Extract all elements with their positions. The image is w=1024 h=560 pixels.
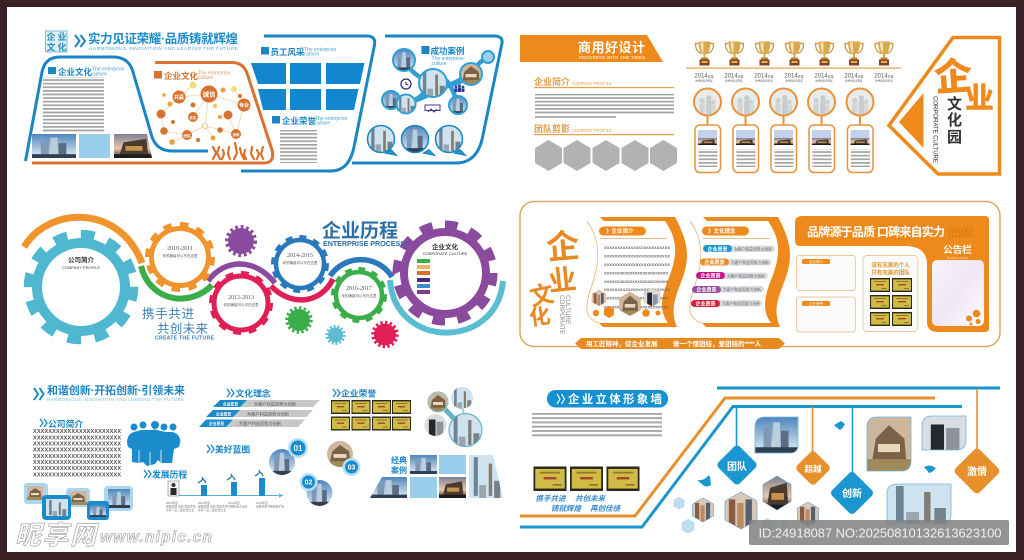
- section: values network: 诚信: [202, 90, 216, 98]
- development timeline: 2014年度: [228, 501, 240, 505]
- calligraphy title: 化: [528, 305, 552, 330]
- gear: corporate culture: [397, 225, 493, 321]
- company profile: XXXXXXXXXXXXXXXXXXXXXXX: [33, 460, 121, 466]
- culture concept: [199, 388, 320, 427]
- timeline line: [686, 68, 901, 69]
- section: success cases: 成功案例: [430, 46, 465, 56]
- section: honors text: [272, 116, 347, 163]
- blueprint: 美好蓝图: [215, 444, 250, 454]
- section: culture text block: [43, 66, 124, 133]
- wavy profile panel: XXXXXXXXXXXXXXXXXXXXXXXXX: [604, 304, 668, 310]
- box labels: 企业荣誉: [809, 301, 824, 306]
- crowd silhouette: [213, 143, 263, 159]
- gear: 2010-2011: 你的铸接可以写在这里: [162, 253, 198, 258]
- company profile: XXXXXXXXXXXXXXXXXXXXXXX: [33, 429, 121, 435]
- gear: 2014-2015: 你的铸接可以写在这里: [282, 260, 318, 265]
- logo badge: 文化: [46, 42, 66, 52]
- development timeline: 2010年度: [166, 501, 178, 505]
- wavy values panel: [690, 217, 790, 327]
- development timeline: 重要荣誉不断积累扩张: [256, 504, 284, 508]
- gear: company profile: [28, 234, 134, 340]
- watermark: 昵享网: [15, 520, 100, 550]
- company profile: XXXXXXXXXXXXXXXXXXXXXXX: [33, 442, 121, 448]
- team photos: 团队剪影: [534, 123, 570, 134]
- company profile: 企业简介: [534, 76, 570, 87]
- bulletin board: 企业文化: [947, 225, 975, 239]
- subheading: HARMONIOUS INNOVATION AND LEADING THE FUTURE: [47, 397, 184, 402]
- year labels: 优秀团队荣誉奖: [725, 78, 743, 82]
- bottom banner: 用工匠精神，促企业发展: [586, 339, 658, 348]
- hanging lines: [736, 389, 977, 473]
- company profile: XXXXXXXXXXXXXXXXXXXXXXX: [33, 472, 121, 478]
- gear: 2010-2011: 2010-2011: [167, 246, 193, 252]
- slogan: 铸就辉煌: [551, 504, 582, 513]
- development timeline: 重要荣誉 创建 科技奖项: [198, 504, 228, 508]
- diamond: innovate: 创新: [842, 487, 862, 500]
- diamond: innovate: [829, 470, 875, 516]
- classic cases: 经典: [391, 455, 407, 465]
- rotated label: CORPORATE CULTURE: [932, 96, 938, 163]
- culture concept: 企业愿景: [223, 402, 238, 406]
- calligraphy title: [933, 56, 994, 115]
- section: values network: [154, 70, 250, 145]
- heading chevrons: [34, 388, 44, 400]
- gear: 2012-2013: [212, 274, 270, 332]
- development timeline: [144, 468, 284, 512]
- wavy values panel: 企业愿景: [696, 286, 717, 294]
- company profile: XXXXXXXXXXXXXXXXXXXXXXX: [33, 436, 121, 442]
- gear: 2014-2015: 2014-2015: [287, 253, 313, 259]
- company profile: [534, 76, 674, 118]
- bulletin board: Bulletin board: [947, 256, 968, 260]
- wavy values panel: 为客户和益而努力创新: [722, 301, 760, 306]
- diamond: team: 团队: [727, 460, 747, 473]
- icon: team: [454, 84, 464, 92]
- section: values network: The enterprise: [198, 70, 230, 76]
- classic cases: 案例: [391, 465, 407, 475]
- gear: company profile: COMPANY PROFILE: [62, 265, 100, 270]
- small boxes: [796, 256, 918, 332]
- calligraphy title: 企: [545, 227, 581, 266]
- ribbon arcs: [24, 217, 503, 333]
- development timeline: 重要荣誉 创建 科技奖项: [166, 504, 196, 508]
- rotated label: CORPORATE: [558, 295, 565, 334]
- slogan: 携手共进: [536, 494, 567, 503]
- pale hexagons: [674, 497, 788, 534]
- wavy values panel: 为客户和益而努力创新: [734, 246, 772, 252]
- panel: orange timeline wall: [520, 35, 1000, 174]
- company profile: XXXXXXXXXXXXXXXXXXXXXXX: [33, 454, 121, 460]
- gear: 2016-2017: 你的铸接可以写在这里: [342, 293, 377, 298]
- section: success cases: [368, 46, 494, 155]
- gear title: ENTERPRISE PROCESS: [323, 239, 405, 248]
- gear: 2014-2015: [274, 238, 326, 290]
- wavy values panel: 企业愿景: [704, 259, 725, 266]
- wavy profile panel: XXXXXXXXXXXXXXXXXXXXXXXXX: [604, 245, 670, 250]
- box labels: [802, 259, 910, 306]
- header ribbon: PROGRESS WITH THE TIMES: [579, 55, 645, 60]
- wavy profile panel: XXXXXXXXXXXXXXXXXXXXXXXXX: [604, 287, 670, 292]
- heading chevrons: [75, 35, 85, 47]
- year labels: 2014年度: [754, 74, 774, 80]
- wavy values panel: 为客户和益而努力创新: [731, 260, 769, 265]
- year labels: [694, 74, 894, 82]
- diamond: passion: [953, 447, 1001, 495]
- section: success cases: The enterprise: [432, 56, 464, 62]
- heading pill: [547, 390, 668, 408]
- year labels: 2014年度: [694, 74, 714, 80]
- gear: 2012-2013: 你的铸接可以写在这里: [224, 302, 259, 307]
- diamond: passion: 激情: [967, 465, 987, 478]
- heading: 实力见证荣耀·品质铸就辉煌: [88, 31, 238, 46]
- frame lines: [26, 36, 502, 171]
- wavy values panel: 企业愿景: [707, 246, 728, 253]
- development timeline: 发展历程: [152, 468, 187, 480]
- culture concept: 文化理念: [236, 388, 271, 398]
- photo tiles: [24, 483, 133, 520]
- development timeline: 2012年度: [198, 501, 210, 505]
- year labels: 2014年度: [844, 74, 864, 80]
- arrow sign: [889, 38, 1000, 174]
- culture photos: [32, 134, 152, 158]
- id watermark: [749, 520, 1009, 545]
- gear: 2016-2017: [334, 270, 384, 320]
- gear: company profile: 公司简介: [68, 255, 94, 264]
- section: culture text block: The enterprise: [92, 66, 124, 72]
- gear title: [322, 219, 405, 248]
- calligraphy title: 业: [965, 82, 994, 115]
- slogan: 再创佳绩: [590, 504, 621, 513]
- photo circles: [424, 387, 482, 446]
- calligraphy title: 企: [933, 56, 974, 100]
- wavy values panel: 为客户和益而努力创新: [723, 287, 761, 292]
- section: values network: 务实: [190, 115, 197, 120]
- certificates: [871, 279, 911, 325]
- year labels: 优秀团队荣誉奖: [815, 78, 833, 82]
- bulletin board: 品牌源于品质 口碑来自实力: [807, 224, 945, 239]
- classic cases: [370, 455, 503, 498]
- section: values network: 企业文化: [164, 71, 199, 81]
- blueprint: 01: [294, 444, 303, 453]
- icon: birds: [697, 421, 936, 486]
- sign text: 园: [947, 129, 962, 146]
- rotated label: CULTURE: [564, 295, 571, 324]
- header ribbon: [520, 35, 663, 62]
- wavy values panel: 为客户和益而努力创新: [727, 274, 765, 278]
- blueprint: [207, 438, 360, 506]
- team photos: COMPANY PROFILE: [572, 128, 612, 133]
- section: values network: 团结: [184, 133, 191, 138]
- section: staff photos: [251, 47, 364, 110]
- section: values network: 专业: [239, 102, 249, 109]
- section: success cases: culture: [432, 61, 447, 67]
- culture concept: 为客户利益而努力创新: [239, 420, 281, 427]
- logo badge: [46, 31, 67, 52]
- slogan: 共创未来: [575, 494, 606, 503]
- development timeline: 获得了第二届最佳企业: [166, 508, 194, 512]
- subheading: HARMONIOUS INNOVATION AND LEADING THE FUTURE: [89, 46, 238, 52]
- box labels: 只有完美的团队: [871, 268, 910, 276]
- year labels: 优秀团队荣誉奖: [785, 78, 803, 82]
- sign text: [947, 95, 962, 146]
- blueprint: 02: [305, 480, 312, 486]
- gear: 2016-2017: 2016-2017: [346, 286, 372, 292]
- wavy profile panel: XXXXXXXXXXXXXXXXXXXXXXXXX: [604, 296, 668, 300]
- section: culture text block: culture: [92, 72, 107, 78]
- placeholder text lines: [532, 413, 662, 438]
- wavy values panel: 企业愿景: [700, 272, 721, 280]
- gear: corporate culture: CORPORATE CULTURE: [423, 251, 468, 256]
- slogan: [142, 306, 214, 342]
- icon: clock: [401, 79, 411, 89]
- year labels: 2014年度: [814, 74, 834, 80]
- bottom banner: [575, 338, 785, 349]
- company profile: [33, 418, 121, 478]
- section: honors text: 企业荣誉: [282, 116, 317, 126]
- speech bubble photos: [368, 126, 465, 155]
- slogan: CREATE THE FUTURE: [155, 336, 214, 342]
- development timeline: 2016年度: [256, 501, 268, 505]
- icon: handshake: [425, 105, 440, 112]
- bottom banner: 做一个懂团结，爱团结的****人: [673, 339, 762, 348]
- profile cards: [694, 88, 874, 172]
- bulletin board: 公告栏: [943, 244, 972, 256]
- year labels: 优秀团队荣誉奖: [695, 78, 713, 82]
- logo badge: 企业: [46, 31, 66, 42]
- year labels: 优秀团队荣誉奖: [875, 78, 893, 82]
- panel: rounded culture board: [520, 202, 1000, 349]
- section: staff photos: 员工风采: [270, 47, 305, 57]
- bulletin board: [795, 216, 989, 332]
- wavy profile panel: XXXXXXXXXXXXXXXXXXXXXXXXX: [604, 270, 668, 276]
- wavy profile panel: XXXXXXXXXXXXXXXXXXXXXXXXX: [604, 262, 670, 267]
- wavy values panel: 企业愿景: [695, 300, 716, 308]
- wavy profile panel: 》企业简介: [606, 227, 634, 235]
- wavy profile panel: XXXXXXXXXXXXXXXXXXXXXXXXX: [604, 279, 668, 284]
- header ribbon: 商用好设计: [578, 40, 645, 55]
- heading: 和谐创新·开拓创新·引领未来: [47, 383, 185, 397]
- calligraphy title: 文: [527, 280, 556, 312]
- slogan: 共创未来: [157, 322, 208, 336]
- wavy values panel: 》文化理念: [708, 227, 736, 235]
- year labels: 2014年度: [784, 74, 804, 80]
- section: values network: 共赢: [174, 94, 184, 101]
- icon: team silhouette: [127, 421, 180, 466]
- section: staff photos: culture: [304, 52, 319, 58]
- gear: corporate culture: 企业文化: [432, 242, 458, 251]
- building photos: [755, 416, 966, 524]
- year labels: 2014年度: [874, 74, 894, 80]
- box labels: 没有完美的个人: [871, 261, 910, 269]
- track lines: [520, 388, 1000, 527]
- calligraphy title: [527, 227, 581, 330]
- panel: gear process wall: [24, 217, 503, 346]
- decorative gears: [227, 227, 397, 346]
- culture concept: 企业愿景: [209, 421, 224, 426]
- watermark: [15, 520, 212, 550]
- gear title: 企业历程: [322, 219, 398, 242]
- section: honors text: The enterprise: [315, 116, 347, 122]
- diamond: surpass: [795, 450, 831, 486]
- id watermark: ID:24918087 NO:20250810132613623100: [758, 526, 1002, 540]
- culture concept: 企业愿景: [216, 412, 231, 416]
- wavy profile panel: XXXXXXXXXXXXXXXXXXXXXXXXX: [604, 254, 670, 258]
- hexagon photos: [692, 476, 818, 529]
- gear: 2012-2013: 2012-2013: [228, 295, 254, 301]
- culture concept: 为客户利益而努力创新: [254, 400, 296, 408]
- section: honors text: culture: [315, 120, 330, 126]
- culture concept: 为客户利益而努力创新: [247, 410, 289, 418]
- diamond: surpass: 超越: [804, 464, 822, 474]
- sign text: 文: [947, 95, 962, 113]
- year labels: 优秀团队荣誉奖: [845, 78, 863, 82]
- section: values network: culture: [198, 75, 213, 81]
- company profile: XXXXXXXXXXXXXXXXXXXXXXX: [33, 448, 121, 454]
- plaques: [534, 468, 639, 490]
- team photos: [534, 123, 677, 171]
- gear: 2010-2011: [148, 224, 212, 290]
- trophies: [696, 42, 893, 66]
- panel: harmony innovation wall: [15, 383, 503, 550]
- section: values network: 创新: [232, 132, 240, 137]
- development timeline: 获得了第二届最佳企业: [198, 508, 226, 512]
- sign text: 化: [947, 111, 962, 129]
- section: culture text block: 企业文化: [58, 67, 93, 77]
- slogan: [536, 494, 621, 513]
- panel: corporate image wall: [520, 388, 1009, 545]
- company profile: 公司简介: [48, 418, 83, 429]
- box labels: 企业简介: [809, 259, 824, 264]
- watermark: www.nipic.cn: [100, 529, 212, 546]
- company profile: COMPANY PROFILE: [572, 81, 612, 86]
- blueprint: 03: [348, 464, 355, 472]
- year labels: 2014年度: [724, 74, 744, 80]
- heading pill: 企业立体形象墙: [568, 392, 662, 406]
- slogan: 携手共进: [142, 306, 194, 321]
- calligraphy title: 业: [547, 264, 578, 297]
- honors plaques: 企业荣誉: [341, 388, 376, 398]
- company profile: XXXXXXXXXXXXXXXXXXXXXXX: [33, 466, 121, 472]
- diamond: team: [716, 444, 758, 486]
- development timeline: 中国知名企业奖: [228, 504, 248, 508]
- section: staff photos: The enterprise: [304, 47, 336, 53]
- honors plaques: [332, 388, 410, 430]
- year labels: 优秀团队荣誉奖: [755, 78, 773, 82]
- wavy profile panel: [587, 217, 687, 327]
